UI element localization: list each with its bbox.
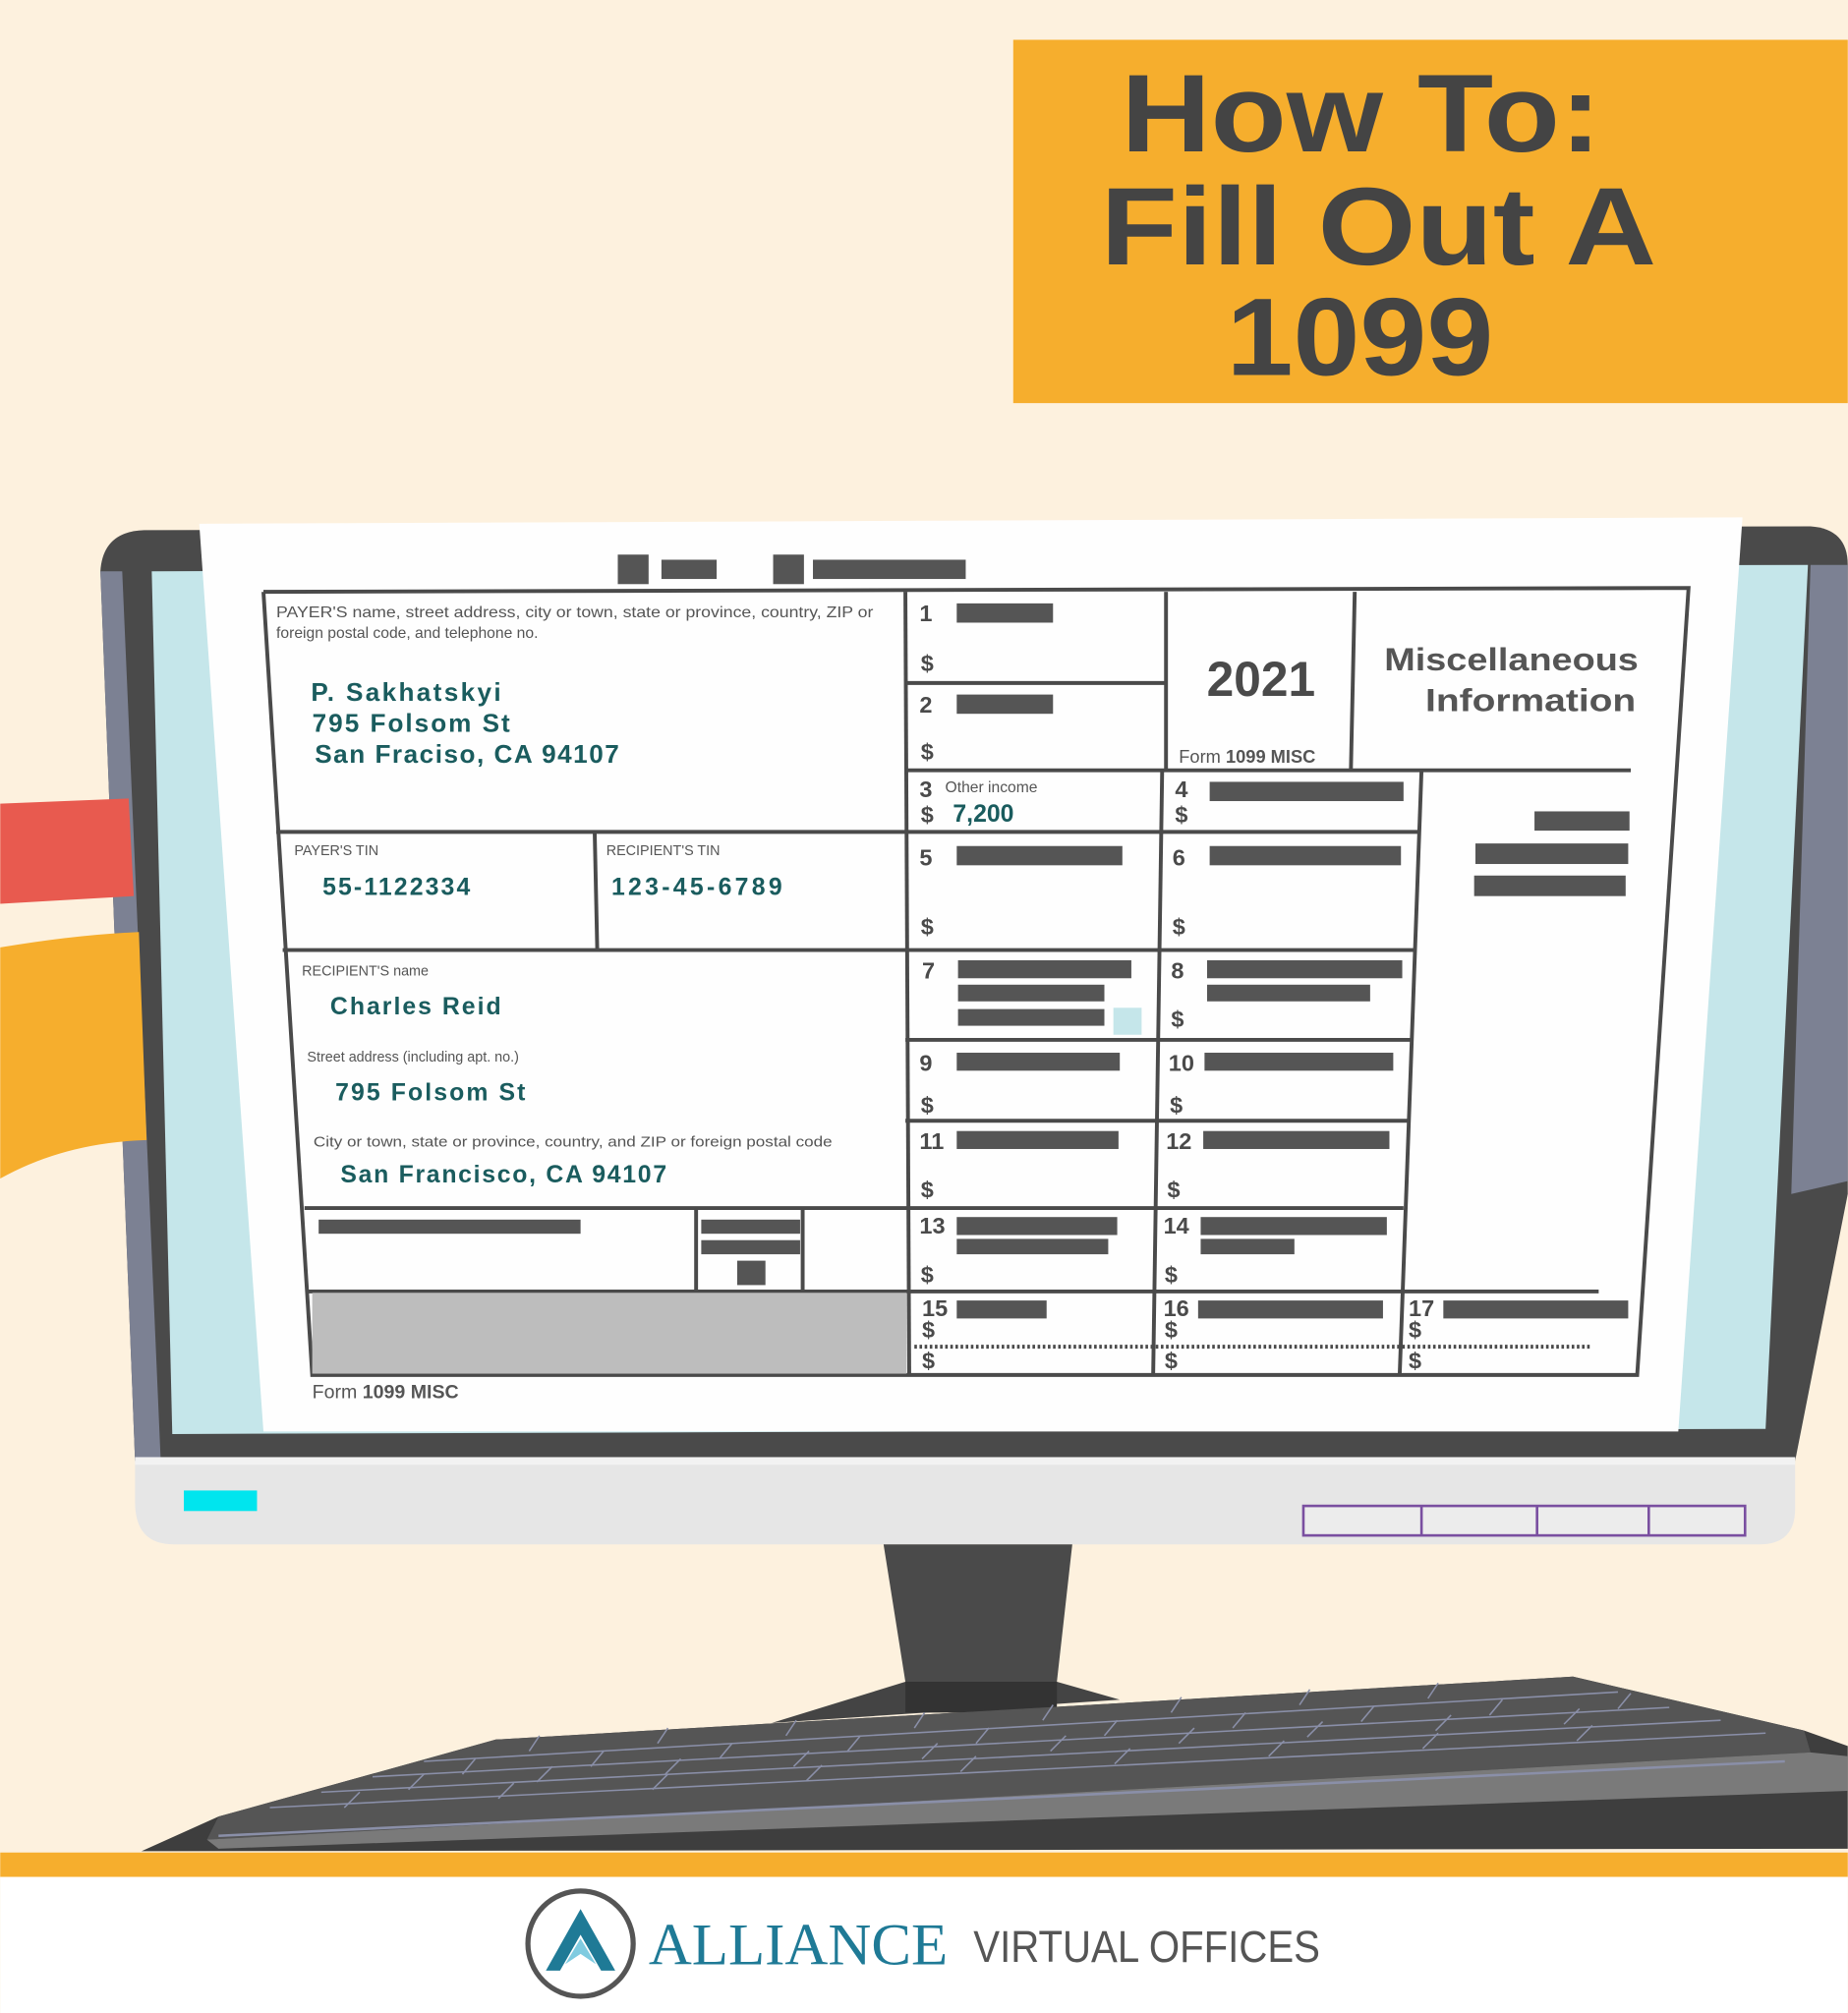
buttons bbox=[1303, 1506, 1745, 1535]
logo: VIRTUAL OFFICES bbox=[973, 1922, 1320, 1972]
keyboard bbox=[142, 1677, 1848, 1851]
payer block: P. Sakhatskyi bbox=[311, 677, 501, 707]
boxes numbers: 13 bbox=[919, 1213, 946, 1238]
boxes numbers: $ bbox=[1409, 1317, 1421, 1343]
bezel bbox=[135, 1457, 1795, 1544]
boxes numbers: 12 bbox=[1166, 1128, 1191, 1154]
boxes numbers bbox=[919, 601, 1434, 1373]
orange band bbox=[0, 1853, 1848, 1877]
boxes numbers: $ bbox=[1165, 1348, 1178, 1373]
paper form: Other income bbox=[946, 779, 1038, 796]
title banner bbox=[1013, 39, 1848, 403]
boxes numbers: 2 bbox=[919, 692, 933, 718]
decorative left ribbons bbox=[0, 798, 146, 1179]
grid lines bbox=[263, 588, 1689, 1375]
boxes numbers: $ bbox=[1175, 802, 1187, 828]
logo bbox=[528, 1891, 1320, 1996]
boxes numbers: 4 bbox=[1175, 776, 1187, 802]
title banner: 1099 bbox=[1227, 274, 1493, 398]
boxes numbers: 14 bbox=[1164, 1213, 1189, 1238]
TINs: 123-45-6789 bbox=[611, 874, 782, 900]
year box: Form 1099 MISC bbox=[1179, 746, 1315, 767]
power light bbox=[184, 1490, 257, 1511]
boxes numbers: $ bbox=[921, 914, 934, 940]
paper form: 7,200 bbox=[953, 801, 1013, 828]
boxes numbers: $ bbox=[921, 1262, 934, 1288]
paper form bbox=[200, 517, 1743, 1431]
recipient block: San Francisco, CA 94107 bbox=[340, 1162, 666, 1188]
title banner: Fill Out A bbox=[1101, 164, 1656, 288]
paper form: Form 1099 MISC bbox=[313, 1381, 459, 1403]
year box: 2021 bbox=[1207, 652, 1315, 707]
recipient block: 795 Folsom St bbox=[335, 1079, 525, 1106]
boxes numbers: 6 bbox=[1173, 844, 1185, 870]
payer block: foreign postal code, and telephone no. bbox=[276, 625, 538, 642]
boxes numbers: 9 bbox=[919, 1050, 933, 1075]
gray placeholder bars bbox=[956, 604, 1630, 1318]
logo: ALLIANCE bbox=[649, 1911, 948, 1977]
stand bbox=[772, 1544, 1120, 1723]
boxes numbers: 5 bbox=[919, 844, 933, 870]
boxes numbers: 10 bbox=[1169, 1050, 1194, 1075]
boxes numbers: $ bbox=[1170, 1092, 1183, 1118]
monitor bbox=[100, 527, 1848, 1544]
boxes numbers: $ bbox=[922, 1348, 935, 1373]
boxes numbers: 15 bbox=[922, 1295, 948, 1321]
boxes numbers: $ bbox=[921, 1092, 934, 1118]
year box bbox=[1179, 641, 1639, 767]
recipient block: Charles Reid bbox=[330, 994, 501, 1020]
boxes numbers: $ bbox=[922, 1317, 935, 1343]
bottom-left bars bbox=[318, 1220, 581, 1234]
payer block: 795 Folsom St bbox=[313, 708, 510, 737]
boxes numbers: $ bbox=[1165, 1262, 1178, 1288]
boxes numbers: $ bbox=[1173, 914, 1185, 940]
boxes numbers: $ bbox=[1165, 1317, 1178, 1343]
boxes numbers: 1 bbox=[919, 601, 933, 626]
TINs: PAYER'S TIN bbox=[294, 843, 378, 859]
boxes numbers: $ bbox=[921, 651, 934, 676]
boxes numbers: $ bbox=[1409, 1348, 1421, 1373]
boxes numbers: 8 bbox=[1171, 957, 1184, 983]
boxes numbers: $ bbox=[1171, 1006, 1184, 1032]
payer block: PAYER'S name, street address, city or town, state or province, country, ZIP or bbox=[276, 604, 873, 621]
TINs: RECIPIENT'S TIN bbox=[606, 843, 721, 859]
boxes numbers: $ bbox=[1168, 1178, 1181, 1203]
boxes numbers: 7 bbox=[922, 957, 935, 983]
boxes numbers: 17 bbox=[1409, 1295, 1434, 1321]
title banner: How To: bbox=[1121, 51, 1601, 175]
boxes numbers: 3 bbox=[919, 776, 933, 802]
TINs bbox=[294, 843, 782, 900]
boxes numbers: 11 bbox=[919, 1128, 944, 1154]
recipient block: City or town, state or province, country, and ZIP or foreign postal code bbox=[314, 1134, 833, 1150]
year box: Information bbox=[1425, 682, 1636, 719]
recipient block: Street address (including apt. no.) bbox=[307, 1050, 519, 1065]
payer block: San Fraciso, CA 94107 bbox=[315, 739, 619, 769]
recipient block bbox=[302, 964, 833, 1188]
year box: Miscellaneous bbox=[1384, 641, 1639, 677]
boxes numbers: $ bbox=[921, 739, 934, 765]
boxes numbers: $ bbox=[921, 1178, 934, 1203]
boxes numbers: $ bbox=[921, 802, 934, 828]
payer block bbox=[276, 604, 873, 769]
TINs: 55-1122334 bbox=[322, 874, 470, 900]
header bars bbox=[617, 554, 649, 584]
recipient block: RECIPIENT'S name bbox=[302, 964, 429, 980]
boxes numbers: 16 bbox=[1164, 1295, 1189, 1321]
